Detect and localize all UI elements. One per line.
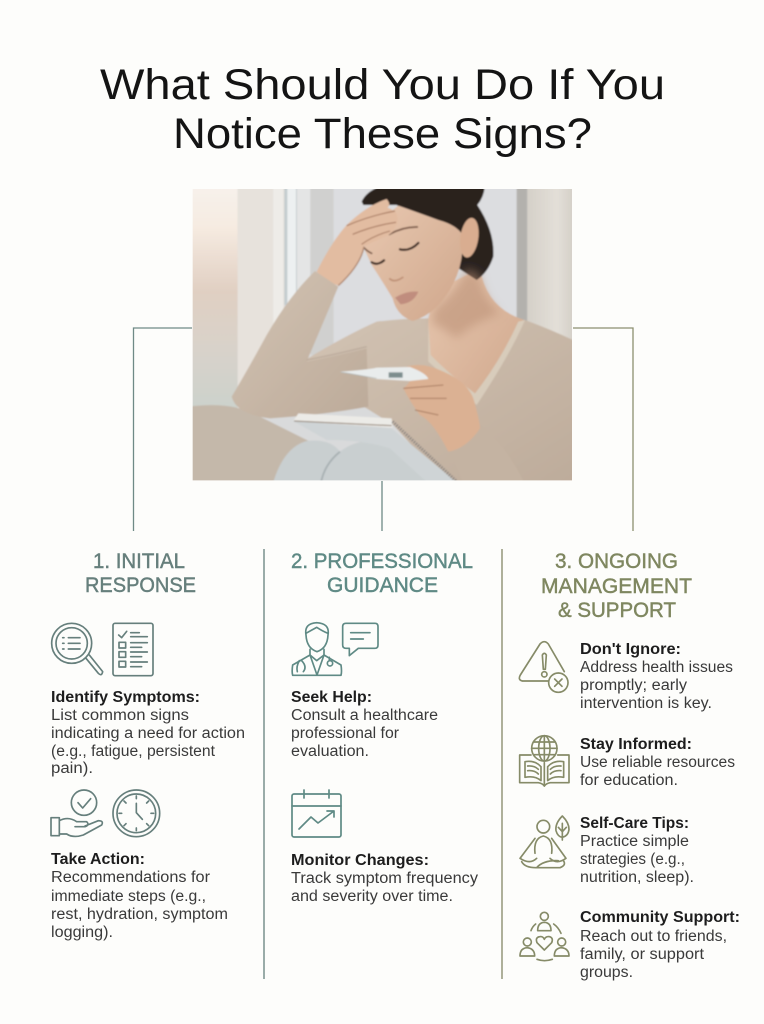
face: [364, 206, 463, 321]
panel: 1. initial response: [51, 550, 245, 941]
text: seek help: professional for: [291, 725, 399, 742]
text: seek help: Seek Help:: [291, 689, 372, 706]
heading: professional guidance: 2. PROFESSIONAL: [291, 550, 473, 573]
heading: professional guidance: [291, 550, 473, 597]
heading: initial response: 1. INITIAL: [93, 550, 185, 573]
trousers: [274, 440, 424, 480]
text: community support: [580, 909, 740, 981]
icon: doctor: [292, 623, 341, 675]
divider: right: [501, 549, 503, 979]
icon: hand with check: [51, 790, 102, 836]
text: self-care tips: Practice simple: [580, 833, 689, 850]
title: [100, 61, 665, 158]
text: don't ignore: promptly; early: [580, 677, 687, 694]
text: identify symptoms: indicating a need for action: [51, 725, 245, 742]
text: community support: family, or support: [580, 946, 705, 963]
text: self-care tips: Self-Care Tips:: [580, 815, 689, 832]
heading: ongoing management and support: & SUPPORT: [558, 599, 676, 622]
connector: right branch: [573, 328, 633, 531]
divider: left: [263, 549, 265, 979]
text: self-care tips: [580, 815, 694, 886]
connector: center branch: [381, 481, 383, 531]
text: identify symptoms: [51, 689, 245, 777]
sweater neckline: [428, 320, 525, 405]
icon: magnifying glass: [52, 623, 103, 675]
heading: ongoing management and support: MANAGEMENT: [541, 575, 692, 598]
connector: left branch: [134, 328, 192, 531]
text: community support: groups.: [580, 964, 633, 981]
text: stay informed: for education.: [580, 772, 678, 789]
text: take action: Recommendations for: [51, 869, 210, 886]
text: self-care tips: nutrition, sleep).: [580, 869, 694, 886]
sofa: [192, 404, 308, 480]
heading: professional guidance: GUIDANCE: [327, 574, 438, 597]
panel: 2. professional guidance: [291, 550, 478, 905]
heading: ongoing management and support: 3. ONGOING: [555, 550, 678, 573]
text: monitor changes: Track symptom frequency: [291, 870, 478, 887]
text: take action: Take Action:: [51, 851, 145, 868]
neck shadow: [432, 268, 500, 338]
neck and chest: [428, 274, 524, 392]
heading: ongoing management and support: [541, 550, 692, 622]
thermometer: [340, 367, 428, 381]
text: stay informed: Use reliable resources: [580, 754, 735, 771]
text: seek help: Consult a healthcare: [291, 707, 438, 724]
torso sweater: [306, 318, 572, 480]
hair back: [362, 178, 493, 280]
text: stay informed: [580, 736, 735, 789]
ear: [460, 216, 480, 259]
text: monitor changes: and severity over time.: [291, 888, 453, 905]
text: don't ignore: [580, 641, 733, 712]
holding hand: [403, 365, 480, 452]
notebook: [298, 422, 455, 480]
text: don't ignore: intervention is key.: [580, 695, 712, 712]
text: take action: rest, hydration, symptom: [51, 906, 228, 923]
text: monitor changes: [291, 852, 478, 905]
text: take action: [51, 851, 228, 941]
icon: clock: [113, 790, 160, 837]
lower sleeve: [450, 425, 530, 495]
text: identify symptoms: Identify Symptoms:: [51, 689, 200, 706]
title: Notice These Signs?: [173, 110, 592, 158]
icon: calendar with trend: [292, 790, 341, 837]
icon: globe and open book: [520, 736, 569, 786]
heading: initial response: [85, 550, 196, 597]
photo: woman checking a thermometer: [192, 189, 572, 480]
panel: 3. ongoing management and support: [519, 550, 740, 981]
text: seek help: [291, 689, 438, 760]
hand on forehead: [317, 199, 398, 286]
eyes, nose, mouth: [372, 243, 418, 264]
sleeve of raised arm: [232, 271, 368, 418]
text: take action: logging).: [51, 924, 113, 941]
text: don't ignore: Don't Ignore:: [580, 641, 681, 658]
heading: initial response: RESPONSE: [85, 574, 196, 597]
text: don't ignore: Address health issues: [580, 659, 733, 676]
text: community support: Reach out to friends,: [580, 928, 727, 945]
text: community support: Community Support:: [580, 909, 740, 926]
icon: checklist: [113, 623, 153, 676]
icon: community with heart: [520, 912, 569, 961]
text: seek help: evaluation.: [291, 743, 369, 760]
text: self-care tips: strategies (e.g.,: [580, 851, 685, 868]
text: identify symptoms: List common signs: [51, 707, 189, 724]
text: take action: immediate steps (e.g.,: [51, 888, 206, 905]
text: identify symptoms: (e.g., fatigue, persistent: [51, 743, 216, 760]
text: identify symptoms: pain).: [51, 760, 93, 777]
icon: speech bubble: [343, 623, 378, 656]
text: monitor changes: Monitor Changes:: [291, 852, 429, 869]
icon: meditation with leaf: [520, 816, 569, 868]
text: stay informed: Stay Informed:: [580, 736, 692, 753]
title: What Should You Do If You: [100, 61, 665, 109]
icon: warning triangle: [519, 642, 568, 692]
